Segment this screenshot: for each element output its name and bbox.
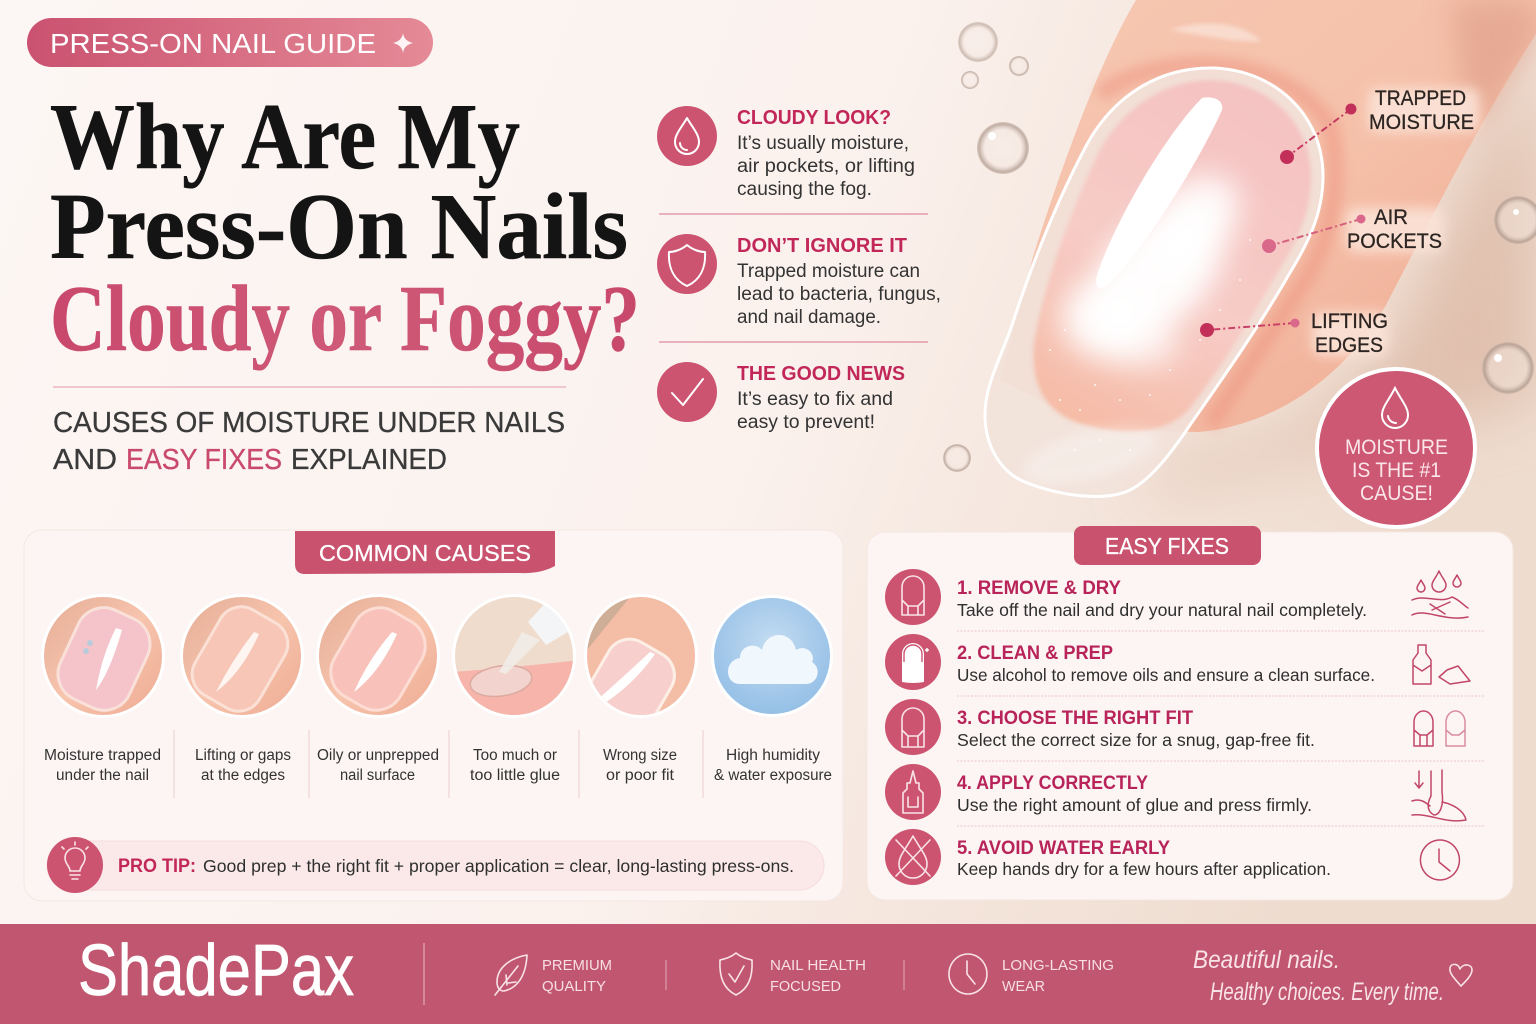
badge: moisture is the #1 cause [1317,369,1475,527]
fix 3: Select the correct size for a snug, gap-free fit. [957,730,1315,750]
info: cloudy look: causing the fog. [737,179,872,200]
callout: lifting edges: LIFTING [1311,310,1388,333]
icon: clock [1420,840,1459,880]
icon: drying hands [1412,571,1468,618]
fix 3 [885,699,1465,755]
badge: premium quality: PREMIUM [542,957,612,974]
moisture fog [1060,157,1258,370]
fix 2: 2. CLEAN & PREP [957,643,1113,664]
cause: moisture trapped [40,590,170,784]
cause: oily or unprepped: nail surface [340,767,415,784]
callout: trapped moisture [1280,87,1474,164]
fix 3: 3. CHOOSE THE RIGHT FIT [957,708,1193,729]
label glow halos [1312,88,1480,356]
footer band [0,924,1536,1024]
icon: sparkle [393,33,413,53]
info: the good news: easy to prevent! [737,412,875,433]
fixes heading: EASY FIXES [1105,533,1229,559]
glossy skin streak [1170,24,1262,42]
callout: trapped moisture: TRAPPED [1375,87,1466,110]
badge: moisture is the #1 cause: CAUSE! [1360,482,1433,505]
icon: light bulb [62,842,88,879]
callout: lifting edges [1200,310,1388,357]
icon: check [672,379,703,405]
causes heading [295,531,555,574]
fixes heading [1074,526,1261,565]
icon: alcohol bottle and pad [1413,645,1470,684]
icon: shield check [720,953,752,995]
logo: ShadePax [78,931,354,1011]
cause: glue [452,590,582,784]
cause: wrong size [584,594,698,784]
info: cloudy look: It’s usually moisture, [737,133,909,154]
cause: oily or unprepped: Oily or unprepped [317,747,439,764]
info: don't ignore it [657,234,941,328]
subtitle: CAUSES OF MOISTURE UNDER NAILS [53,407,565,439]
finger shadow [1130,60,1536,500]
finger tone [1450,0,1536,140]
icon: leaf [495,955,527,995]
icon: fit nail [902,708,924,747]
tagline: Healthy choices. Every time. [1210,978,1444,1006]
cause: glue: too little glue [470,767,560,784]
tagline [1193,946,1472,1006]
guide pill: PRESS-ON NAIL GUIDE [50,28,376,59]
badge: nail health focused: FOCUSED [770,978,841,995]
cause: wrong size: Wrong size [603,747,677,764]
icon: heart [1450,964,1472,986]
fix 2: Use alcohol to remove oils and ensure a clean surface. [957,665,1375,685]
icon: drop [675,118,699,154]
fix 1: Take off the nail and dry your natural nail completely. [957,600,1367,620]
icon: shield [669,245,705,286]
nail highlight [1096,97,1222,288]
info: cloudy look [657,106,915,200]
nail outer [985,68,1323,496]
subtitle [53,387,566,476]
info: cloudy look: CLOUDY LOOK? [737,107,891,129]
cause: humidity [711,595,833,784]
badge: long-lasting wear: LONG-LASTING [1002,957,1114,974]
info: don't ignore it: and nail damage. [737,307,881,328]
callout: lifting edges: EDGES [1315,334,1383,357]
pro tip: PRO TIP: [118,856,196,877]
cause: humidity: & water exposure [714,767,832,784]
info: the good news: THE GOOD NEWS [737,363,905,385]
badge: moisture is the #1 cause: MOISTURE [1345,436,1448,459]
subtitle: EXPLAINED [291,444,447,476]
pro tip [47,837,824,893]
sparkle flecks [1049,239,1251,451]
cause: moisture trapped: Moisture trapped [44,747,161,764]
guide pill [27,18,433,67]
cause: oily or unprepped [316,590,446,784]
cause: humidity: High humidity [726,747,820,764]
badge: premium quality: QUALITY [542,978,606,995]
fix 2 [885,634,1470,690]
subtitle: EASY FIXES [126,444,282,476]
fix 5: 5. AVOID WATER EARLY [957,838,1170,859]
badge: nail health focused [720,953,866,995]
badge: nail health focused: NAIL HEALTH [770,957,866,974]
fix 1: 1. REMOVE & DRY [957,578,1121,599]
icon: clock [949,954,987,994]
title: Cloudy or Foggy? [50,267,640,371]
cause: lifting or gaps: Lifting or gaps [195,747,291,764]
fix 5: Keep hands dry for a few hours after application. [957,859,1331,879]
fix 1 [885,569,1468,625]
pro tip: Good prep + the right fit + proper application = clear, long-lasting press-ons. [203,856,794,876]
cause: lifting or gaps: at the edges [201,767,285,784]
cause: glue: Too much or [473,747,557,764]
causes heading: COMMON CAUSES [319,540,531,566]
title: Why Are My [50,85,520,189]
tagline: Beautiful nails. [1193,946,1340,974]
cause: wrong size: or poor fit [606,767,675,784]
icon: glue bottle [903,771,923,813]
badge: moisture is the #1 cause: IS THE #1 [1352,459,1441,482]
callout: air pockets: POCKETS [1347,230,1442,253]
info: the good news: It’s easy to fix and [737,389,893,410]
fix 4: Use the right amount of glue and press firmly. [957,795,1312,815]
info: don't ignore it: lead to bacteria, fungus, [737,284,941,305]
icon: clean nail [902,643,924,683]
water droplets [943,22,1536,472]
title [50,85,640,371]
info: cloudy look: air pockets, or lifting [737,156,915,177]
icon: cloud [728,635,818,684]
subtitle: AND [53,444,117,476]
callout: air pockets [1262,206,1442,253]
hero nail photo [985,0,1536,500]
callout: trapped moisture: MOISTURE [1369,111,1474,134]
icon: nail sizes [1414,711,1465,746]
badge: long-lasting wear: WEAR [1002,978,1045,995]
cause: lifting or gaps [180,590,310,784]
fix 4 [885,764,1466,821]
fix 5 [885,829,1459,885]
title: Press-On Nails [50,175,628,279]
tip frost [1016,414,1164,496]
icon: pressing hand [1412,770,1466,821]
icon: no water [896,836,930,878]
badge: long-lasting wear [949,954,1114,995]
icon: nail [902,576,924,615]
nail bed [1033,80,1311,431]
info: don't ignore it: DON’T IGNORE IT [737,235,907,257]
icon: badge water drop [1382,388,1408,428]
finger [1000,0,1536,432]
info: the good news [657,362,905,433]
panel: easy fixes [867,526,1513,900]
nail fold [1100,65,1335,425]
callout: air pockets: AIR [1374,206,1408,229]
panel: common causes [24,530,843,901]
info: don't ignore it: Trapped moisture can [737,261,920,282]
badge: premium quality [495,955,612,995]
fix 4: 4. APPLY CORRECTLY [957,773,1148,794]
cause: moisture trapped: under the nail [56,767,149,784]
